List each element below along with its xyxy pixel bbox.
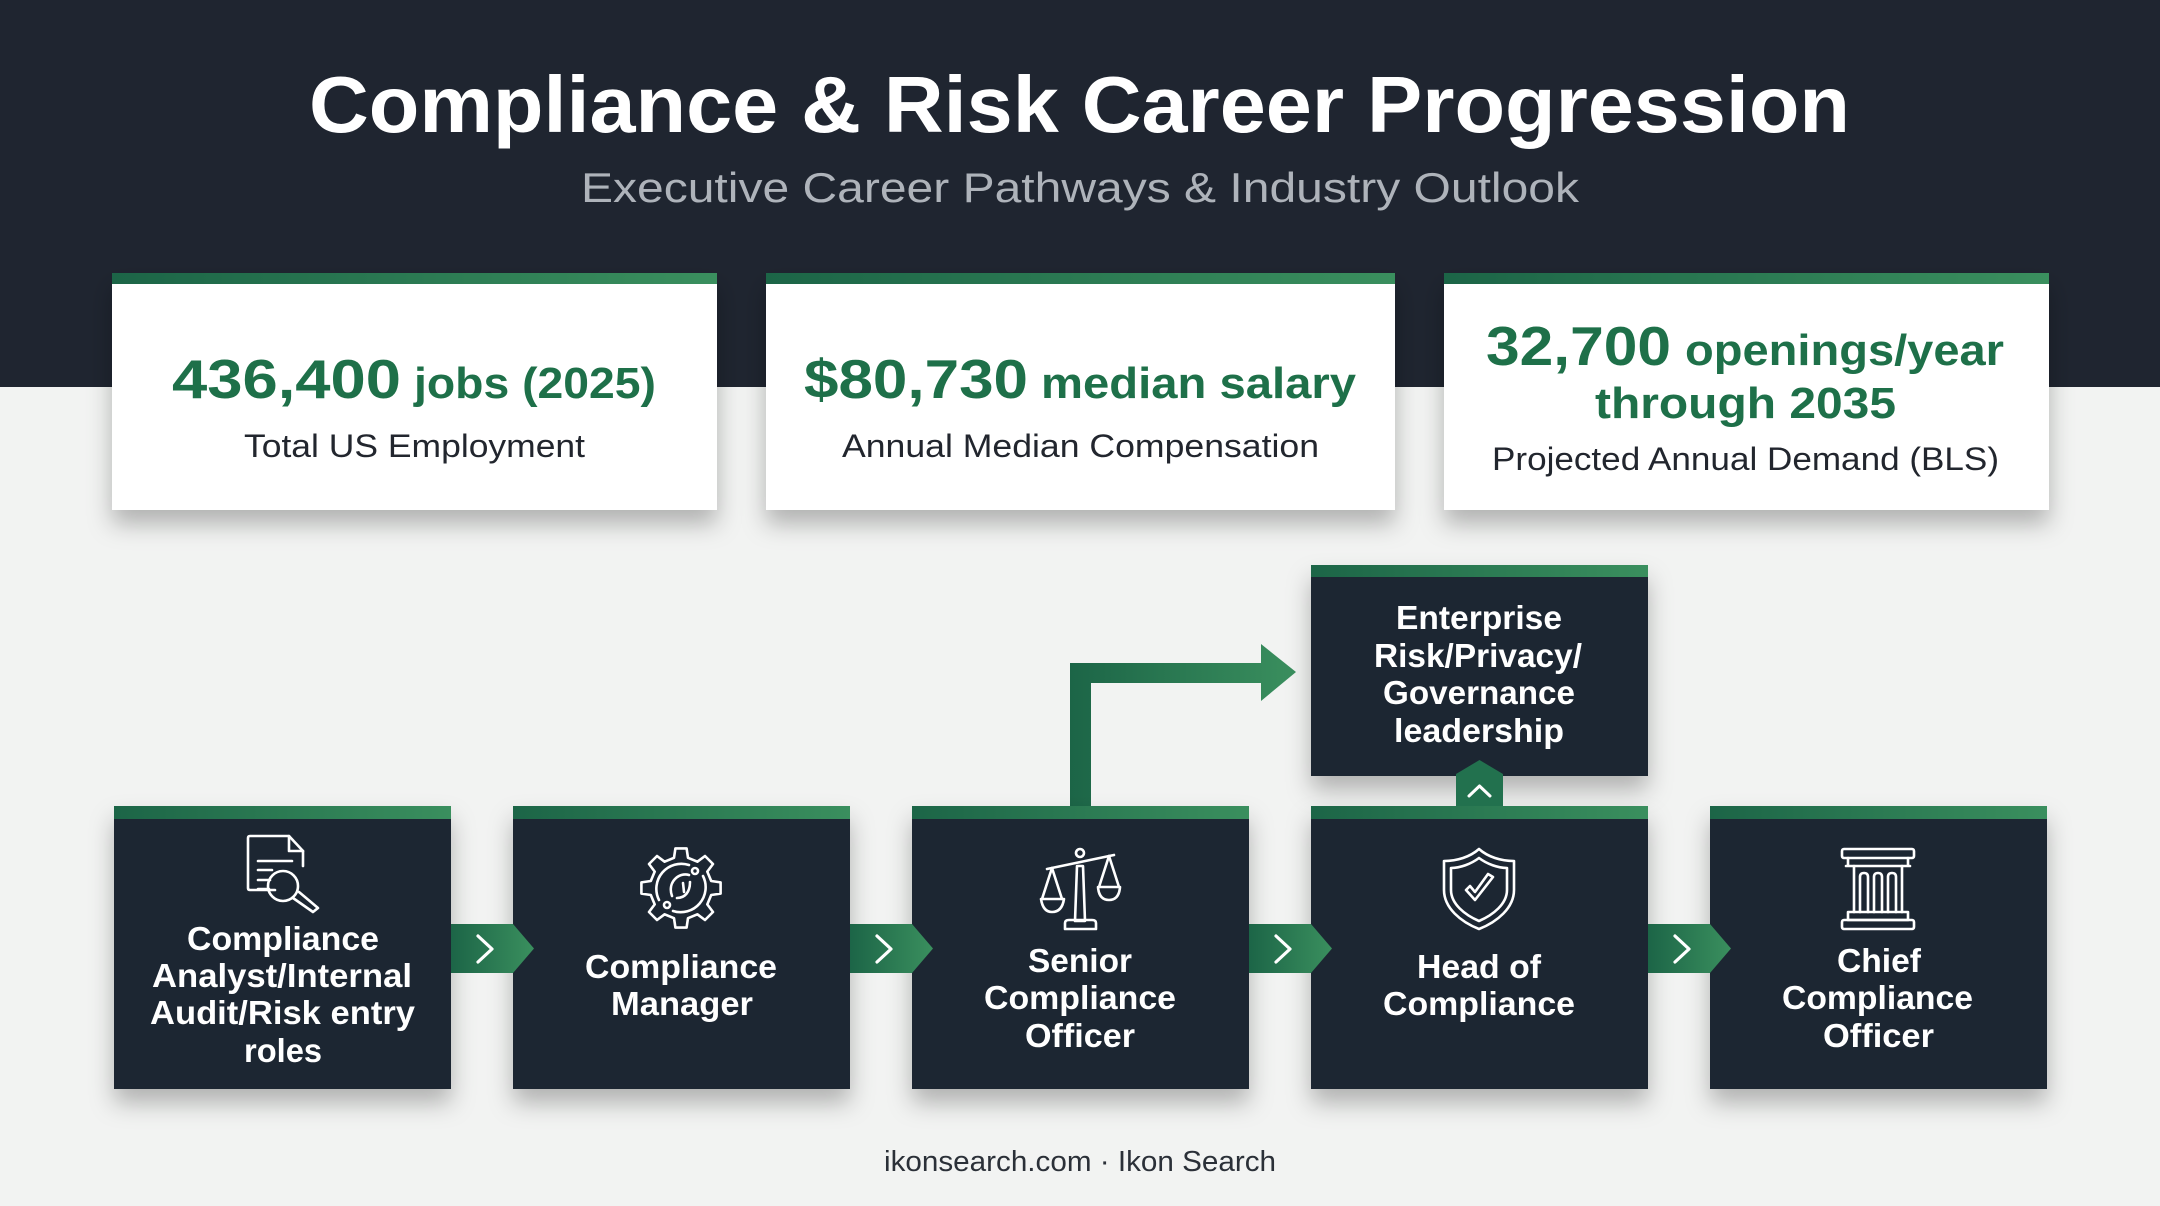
label	[150, 920, 416, 1069]
stat: jobs: 436,400	[172, 348, 401, 410]
stat card: openings	[1444, 273, 2049, 510]
label	[1383, 948, 1575, 1022]
label: Compliance	[187, 920, 379, 957]
stat: openings: 32,700	[1486, 315, 1671, 377]
box: head of compliance	[1311, 806, 1648, 1089]
icon: document with magnifier	[248, 836, 318, 912]
box: compliance manager	[513, 806, 850, 1089]
box: senior compliance officer	[912, 806, 1249, 1089]
label	[984, 942, 1176, 1054]
box: analyst	[114, 806, 451, 1089]
stat: salary: $80,730	[804, 348, 1028, 410]
label: roles	[244, 1032, 322, 1069]
stat caption: Annual Median Compensation	[842, 428, 1319, 464]
label	[1374, 599, 1582, 749]
arrow: step 3 to 4	[1249, 924, 1332, 973]
arrow: step 4 to 5	[1648, 924, 1731, 973]
label: Head of	[1417, 948, 1542, 985]
box: enterprise leadership	[1311, 565, 1648, 776]
arrow: head of compliance up to enterprise	[1456, 760, 1503, 806]
label: Enterprise	[1396, 599, 1562, 636]
title: Compliance & Risk Career Progression	[309, 60, 1850, 149]
label: Governance	[1383, 674, 1575, 711]
stat: openings: openings/year	[1685, 326, 2004, 375]
label: Audit/Risk entry	[150, 994, 416, 1031]
stat caption: Projected Annual Demand (BLS)	[1492, 441, 1999, 477]
icon: pillar	[1842, 849, 1914, 929]
icon: scales of justice	[1041, 849, 1120, 929]
label: leadership	[1394, 712, 1564, 749]
label: Compliance	[585, 948, 777, 985]
box: chief compliance officer	[1710, 806, 2047, 1089]
label: Officer	[1025, 1017, 1135, 1054]
footer: ikonsearch.com · Ikon Search	[884, 1146, 1276, 1178]
header band	[0, 0, 2160, 387]
label: Senior	[1028, 942, 1132, 979]
stat: openings line 2: through 2035	[1595, 379, 1896, 428]
icon: gear	[641, 848, 721, 928]
arrow: step 2 to 3	[850, 924, 933, 973]
label: Manager	[611, 985, 753, 1022]
label: Compliance	[984, 979, 1176, 1016]
arrow: step 1 to 2	[451, 924, 534, 973]
label: Compliance	[1782, 979, 1973, 1016]
label: Compliance	[1383, 985, 1575, 1022]
stat card: salary	[766, 273, 1395, 510]
label: Officer	[1823, 1017, 1934, 1054]
label: Chief	[1837, 942, 1922, 979]
stat card: employment	[112, 273, 717, 510]
label	[1782, 942, 1973, 1054]
stat: salary: median salary	[1041, 359, 1357, 408]
stat caption: Total US Employment	[244, 428, 585, 464]
subtitle: Executive Career Pathways & Industry Outlook	[581, 164, 1580, 211]
label: Analyst/Internal	[152, 957, 412, 994]
arrow: senior officer up to enterprise leadership	[1070, 644, 1296, 806]
label: Risk/Privacy/	[1374, 637, 1582, 674]
stat: jobs: jobs (2025)	[413, 359, 656, 408]
icon: shield with check	[1444, 849, 1514, 929]
label	[585, 948, 777, 1022]
